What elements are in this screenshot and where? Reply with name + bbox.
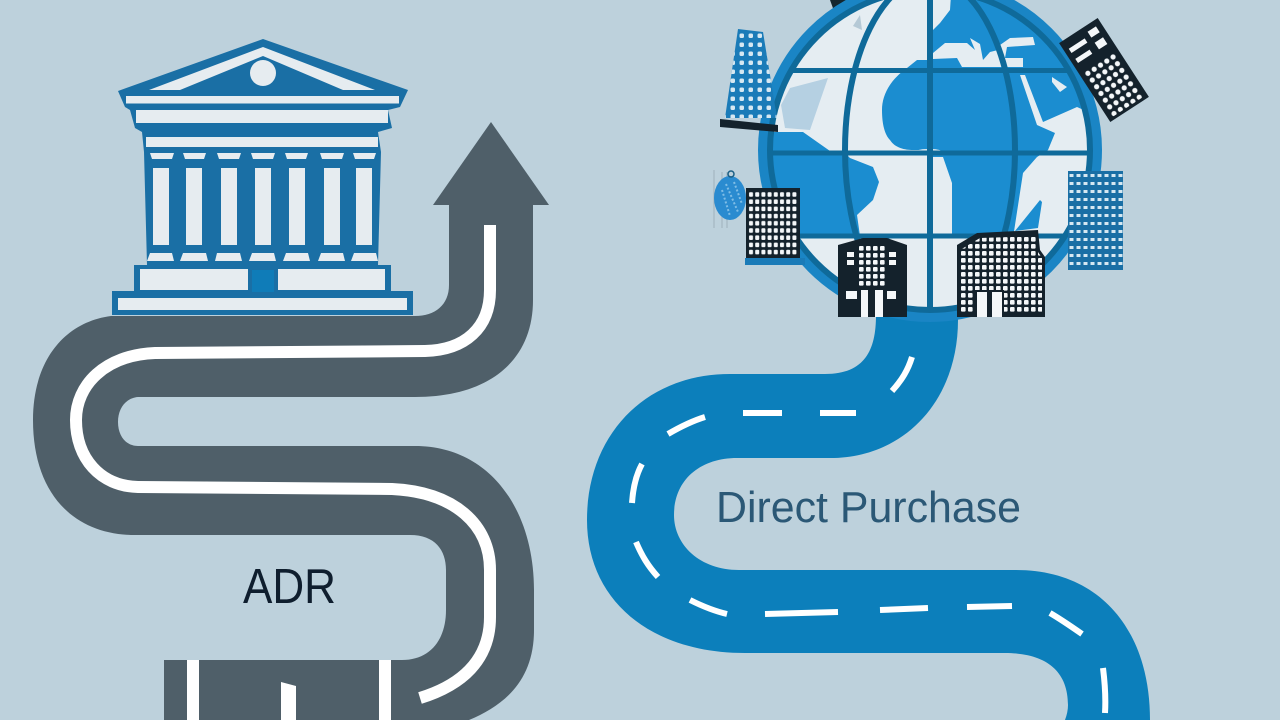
Direct Purchase road xyxy=(587,305,1150,720)
building: bottom right xyxy=(957,230,1045,317)
building: right tower xyxy=(1068,171,1123,270)
steps xyxy=(118,269,407,310)
icon: small ball xyxy=(714,170,746,228)
building: upper right tower xyxy=(1059,18,1149,122)
label: ADR: ADR xyxy=(243,560,336,614)
globe ring outer xyxy=(763,0,1097,317)
building: left xyxy=(745,188,805,265)
road dashes xyxy=(632,357,1105,713)
building: top xyxy=(830,0,857,11)
globe ring inner xyxy=(770,0,1090,310)
roof xyxy=(112,39,413,315)
building: upper left tower xyxy=(720,29,778,132)
columns xyxy=(147,153,378,261)
ADR road with arrow xyxy=(33,122,549,720)
pale land wash xyxy=(781,78,828,130)
label: Direct Purchase: Direct Purchase xyxy=(716,483,1021,532)
road start markings xyxy=(187,660,391,720)
continents xyxy=(773,0,1082,234)
graticule xyxy=(773,0,1087,307)
icon: bank building xyxy=(112,39,413,315)
arrow head xyxy=(433,122,549,205)
icon: globe xyxy=(714,0,1149,322)
pediment xyxy=(149,47,375,90)
road centre line xyxy=(76,225,490,698)
pediment circle xyxy=(250,60,276,86)
entablature bands xyxy=(126,96,399,147)
building: bottom left xyxy=(838,238,907,317)
